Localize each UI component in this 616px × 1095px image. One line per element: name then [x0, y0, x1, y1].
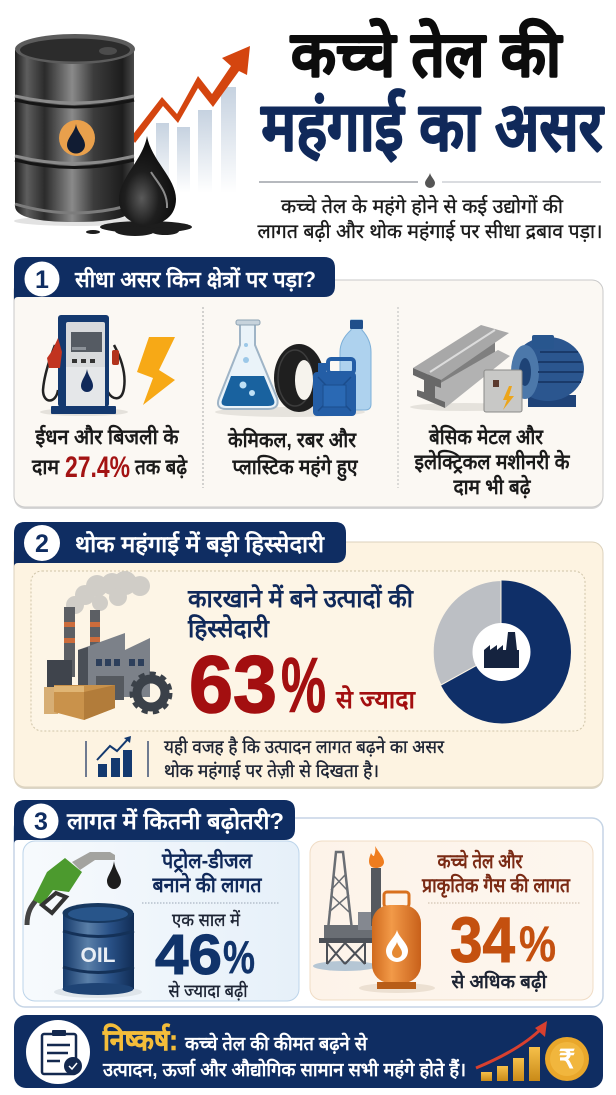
text: basic metals and machinery — [414, 424, 570, 499]
panel: section 1 direct impact — [14, 257, 603, 509]
illustration: oil barrel with rising arrow and drop — [14, 34, 250, 236]
text: conclusion label: निष्कर्ष: — [102, 1023, 178, 1057]
icon: green fuel nozzle — [27, 852, 115, 925]
icon: oil drop — [119, 136, 176, 225]
section 2 heading tab — [14, 522, 346, 570]
icon: steel i-beam — [410, 325, 520, 411]
panel: conclusion banner — [14, 1015, 603, 1088]
subtitle: लागत बढ़ी और थोक महंगाई पर सीधा द्रबाव पड़ा। — [258, 220, 602, 243]
text: basic metals and machinery: इलेक्ट्रिकल मशीनरी के — [414, 449, 570, 474]
big number 34%: % — [519, 916, 556, 972]
icon: factory glyph — [484, 632, 519, 668]
text: conclusion body: कच्चे तेल की कीमत बढ़ने से — [184, 1032, 368, 1055]
big number 63% — [189, 640, 326, 730]
text: fuel and electricity: 27.4% — [65, 451, 130, 484]
icon: black oil barrel — [14, 34, 146, 226]
section 2 heading tab: थोक महंगाई में बड़ी हिस्सेदारी — [75, 530, 325, 557]
donut chart: 63 percent — [433, 580, 571, 724]
title: कच्चे तेल की — [290, 18, 563, 90]
text: petrol diesel making cost: बनाने की लागत — [152, 872, 262, 897]
icon: control box — [484, 370, 522, 412]
icon: plastic bottle — [340, 320, 371, 410]
panel: section 2 share in wholesale inflation — [14, 522, 603, 789]
icon: tyre — [274, 344, 324, 412]
icon: factory — [44, 571, 170, 720]
text: petrol diesel making cost: पेट्रोल-डीजल — [161, 848, 253, 873]
dashed inner card — [31, 571, 585, 731]
card: petrol diesel cost — [23, 841, 299, 1001]
text: conclusion body — [102, 1032, 466, 1081]
text: chemicals rubber plastic: केमिकल, रबर और — [227, 427, 357, 452]
text: chemicals rubber plastic — [227, 427, 359, 482]
section 3 heading tab: लागत में कितनी बढ़ोतरी? — [66, 807, 284, 834]
text: why it shows quickly: यही वजह है कि उत्पादन लागत बढ़ने का असर — [164, 736, 444, 757]
icon: clipboard checklist — [26, 1020, 90, 1084]
section 2 heading tab: 2 — [35, 530, 49, 558]
text: basic metals and machinery: बेसिक मेटल और — [428, 424, 544, 449]
text: why it shows quickly — [164, 736, 444, 781]
text: fuel and electricity: ईधन और बिजली के — [35, 424, 179, 449]
text: fuel and electricity: तक बढ़े — [134, 454, 188, 479]
icon: lightning bolt — [137, 337, 175, 405]
subtitle: कच्चे तेल के महंगे होने से कई उद्योगों की — [281, 195, 564, 218]
icon: fuel pump — [40, 315, 128, 416]
panel: section 3 cost increase — [14, 800, 603, 1007]
icon: gold bars — [481, 1047, 540, 1081]
text: more than increased: से अधिक बढ़ी — [451, 970, 548, 993]
big number 63%: % — [281, 641, 326, 729]
text: why it shows quickly: थोक महंगाई पर तेज़ी से दिखता है। — [164, 760, 379, 781]
icon: oil puddle — [86, 221, 192, 236]
big number 34%: 34 — [450, 904, 515, 976]
icon: bottle cap — [350, 320, 363, 329]
big number 46%: 46 — [155, 923, 222, 987]
text: chemicals rubber plastic: प्लास्टिक महंगे हुए — [232, 454, 359, 482]
icon: growth chart — [86, 736, 148, 777]
divider with drop — [259, 173, 601, 188]
title — [260, 18, 605, 165]
subtitle — [258, 195, 602, 243]
section 3 heading tab: 3 — [34, 808, 48, 836]
text: fuel and electricity: दाम — [31, 456, 60, 479]
arrow: rising red — [476, 1021, 547, 1068]
text: crude and gas cost: कच्चे तेल और — [437, 849, 523, 873]
icon: rupee coin — [545, 1037, 589, 1081]
text: factory product share: हिस्सेदारी — [187, 614, 270, 643]
section 1 heading tab — [14, 257, 335, 301]
card: crude and natural gas cost — [310, 841, 593, 1000]
section 1 heading tab: सीधा असर किन क्षेत्रों पर पड़ा? — [74, 266, 316, 292]
icon: offshore oil rig — [313, 852, 381, 971]
text: petrol diesel making cost — [152, 848, 262, 897]
icon: blue oil barrel — [54, 903, 142, 998]
text: more than: से ज्यादा — [335, 685, 417, 714]
big number 46% — [155, 923, 255, 987]
text: basic metals and machinery: दाम भी बढ़े — [453, 474, 532, 499]
icon: blue oil barrel: OIL — [80, 944, 116, 967]
text: in one year: एक साल में — [172, 909, 241, 930]
icon: rising bars — [156, 87, 236, 193]
icon: rupee coin: ₹ — [559, 1044, 575, 1074]
icon: chemical flask — [215, 320, 365, 417]
icon: electric motor — [511, 335, 584, 407]
text: more than increased: से ज्यादा बढ़ी — [168, 980, 248, 1001]
icon: orange gas cylinder — [359, 892, 435, 993]
text: fuel and electricity — [31, 424, 188, 484]
section 1 heading tab: 1 — [35, 266, 49, 294]
text: factory product share: कारखाने में बने उत्पादों की — [187, 584, 414, 613]
text: crude and gas cost — [421, 849, 571, 898]
icon: jerrycan — [313, 359, 356, 416]
text: factory product share — [187, 584, 414, 643]
text: conclusion body: उत्पादन, ऊर्जा और औद्योगिक सामान सभी महंगे होते हैं। — [102, 1058, 466, 1081]
big number 34% — [450, 904, 556, 976]
icon: gas flare — [369, 846, 384, 868]
icon: drop from nozzle — [107, 861, 121, 889]
big number 63%: 63 — [189, 640, 277, 730]
big number 46%: % — [223, 931, 255, 983]
section 3 heading tab — [14, 800, 295, 848]
text: crude and gas cost: प्राकृतिक गैस की लागत — [421, 873, 571, 898]
arrow: price rise — [131, 46, 250, 143]
